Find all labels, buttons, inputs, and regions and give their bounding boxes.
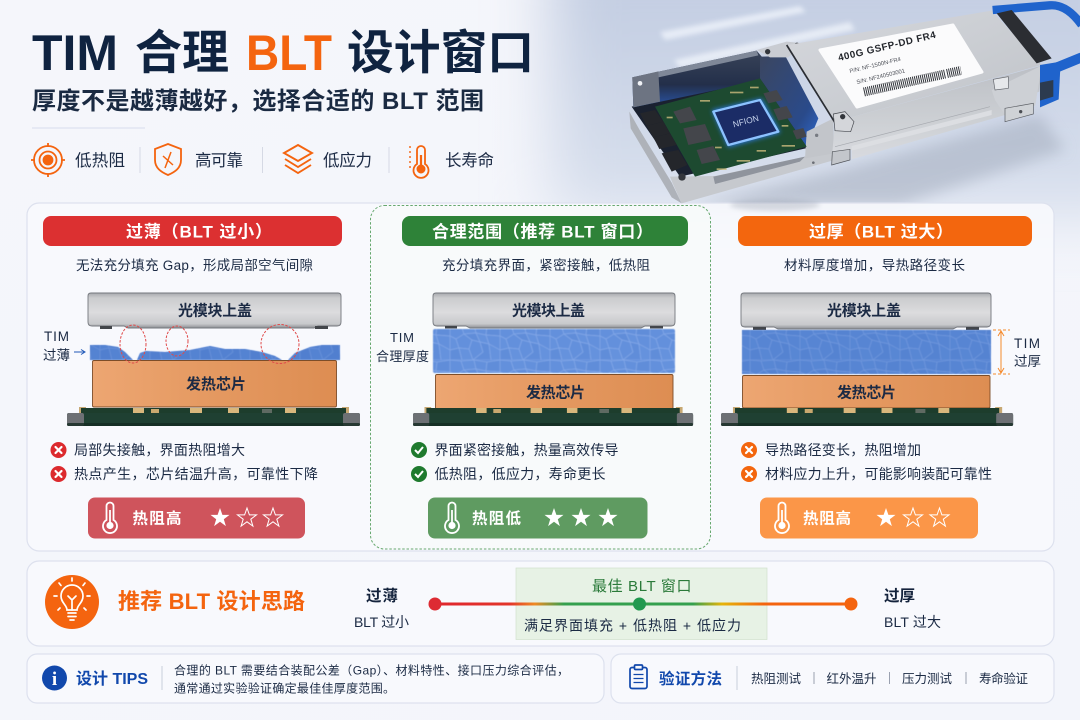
icon: info: i <box>52 669 57 690</box>
label: high reliability: 高可靠 <box>195 151 243 170</box>
subtitle: 厚度不是越薄越好，选择合适的 BLT 范围 <box>32 88 484 115</box>
optimal window band <box>516 568 767 640</box>
header: too thick: 过厚（BLT 过大） <box>809 222 953 242</box>
proper TIM layer <box>433 329 675 373</box>
title <box>32 25 534 81</box>
thick TIM layer <box>742 330 991 374</box>
heading: 验证方法 <box>659 669 722 688</box>
method list: 寿命验证 <box>979 671 1028 686</box>
heat chip <box>436 374 673 418</box>
label: too thick: BLT 过大 <box>884 614 941 630</box>
diagram: thin TIM <box>43 293 360 426</box>
TIM callout: 过薄 <box>43 348 70 363</box>
header: too thick <box>738 216 1032 246</box>
bullets: recommended: 界面紧密接触，热量高效传导 <box>434 442 618 458</box>
method list: 热阻测试 <box>751 671 801 686</box>
label: low thermal resistance: 低热阻 <box>75 151 125 170</box>
circuit board <box>721 407 1013 426</box>
blue pull handle <box>993 5 1080 107</box>
rating: high thermal resistance: 热阻高 <box>803 508 851 528</box>
icon: clipboard <box>630 665 647 688</box>
title: 设计窗口 <box>347 26 534 79</box>
rating: high thermal resistance: 热阻高 <box>132 508 182 528</box>
column: too thin <box>43 216 360 538</box>
description: 材料厚度增加，导热路径变长 <box>784 258 966 273</box>
rating: low thermal resistance <box>428 498 648 538</box>
icon: low thermal resistance target <box>31 143 65 177</box>
heading: 设计 TIPS <box>76 670 148 688</box>
title: 合理 <box>135 26 229 79</box>
module cover <box>741 293 991 330</box>
label: long life: 长寿命 <box>445 151 494 170</box>
thickness scale line <box>428 598 858 610</box>
heat chip: 发热芯片 <box>186 375 246 393</box>
label: too thin <box>354 587 409 630</box>
TIM callout: TIM <box>1014 336 1040 351</box>
description: 充分填充界面，紧密接触，低热阻 <box>442 257 650 273</box>
panel: three BLT cases <box>27 203 1054 551</box>
heat chip <box>742 376 990 416</box>
icon: light bulb <box>45 575 99 629</box>
optimal window band: 最佳 BLT 窗口 <box>592 577 692 595</box>
circuit board <box>413 407 693 426</box>
header: recommended: 合理范围（推荐 BLT 窗口） <box>432 222 653 242</box>
method list: 压力测试 <box>902 671 952 686</box>
header: too thin: 过薄（BLT 过小） <box>126 222 272 242</box>
heading: 推荐 BLT 设计思路 <box>118 589 305 614</box>
bullets: too thick: 材料应力上升，可能影响装配可靠性 <box>765 466 992 482</box>
TIM callout: TIM <box>44 329 69 344</box>
heat chip <box>92 360 336 421</box>
bullets: recommended: 低热阻，低应力，寿命更长 <box>434 466 606 482</box>
method list <box>751 671 1028 686</box>
icon: shield <box>155 144 181 175</box>
panel: recommended BLT approach <box>27 561 1054 646</box>
circuit board <box>640 78 807 177</box>
icon: thermometer <box>410 146 428 178</box>
label: too thin: BLT 过小 <box>354 614 409 630</box>
module tray and base <box>629 42 834 203</box>
product label: 400G GSFP-DD FR4 <box>837 30 937 64</box>
column: recommended <box>376 216 693 538</box>
rating: high thermal resistance <box>88 498 305 538</box>
label: too thick <box>884 587 941 630</box>
title: BLT <box>246 25 332 81</box>
module cover: 光模块上盖 <box>512 302 585 320</box>
tips text: 合理的 BLT 需要结合装配公差（Gap）、材料特性、接口压力综合评估， <box>174 662 569 678</box>
heat chip: 发热芯片 <box>837 384 896 402</box>
header: too thin <box>43 216 342 246</box>
product label: S/N: NF240503001 <box>856 69 906 86</box>
module cover: 光模块上盖 <box>178 302 252 320</box>
optimal window band: 满足界面填充 + 低热阻 + 低应力 <box>524 618 741 634</box>
label: low stress: 低应力 <box>323 151 372 170</box>
module cover <box>433 293 675 328</box>
title: TIM <box>32 25 118 81</box>
product label: P/N: NF-1500N-FR4 <box>849 57 902 75</box>
bullets: too thin: 局部失接触，界面热阻增大 <box>74 442 245 458</box>
product label <box>820 25 982 107</box>
thin TIM layer with air gaps <box>90 345 340 360</box>
tips text <box>174 662 569 696</box>
module cover: 光模块上盖 <box>827 302 901 320</box>
tips text: 通常通过实验验证确定最佳佳厚度范围。 <box>174 680 395 696</box>
TIM callout: 合理厚度 <box>376 349 429 364</box>
icon: layers <box>284 145 312 173</box>
module lid <box>787 11 1042 165</box>
heat chip: 发热芯片 <box>526 384 585 402</box>
glowing chip: NFION <box>732 113 760 129</box>
TIM callout <box>1014 336 1041 369</box>
diagram: proper TIM <box>376 293 693 426</box>
bullets: too thick <box>741 442 992 482</box>
diagram: thick TIM <box>721 293 1041 426</box>
thickness dimension arrow <box>993 330 1010 374</box>
TIM callout <box>43 329 85 363</box>
TIM callout: 过厚 <box>1014 354 1041 369</box>
label: too thick: 过厚 <box>884 587 915 605</box>
method list: 红外温升 <box>826 671 876 686</box>
panel: design tips <box>27 654 604 703</box>
bullets: too thin <box>50 442 318 482</box>
circuit board <box>67 407 360 426</box>
bullets: recommended <box>411 442 618 482</box>
rating: low thermal resistance: 热阻低 <box>472 510 521 528</box>
header: recommended <box>402 216 688 246</box>
feature row <box>31 143 494 178</box>
rating: high thermal resistance <box>760 498 978 538</box>
bullets: too thin: 热点产生，芯片结温升高，可靠性下降 <box>74 466 318 482</box>
bullets: too thick: 导热路径变长，热阻增加 <box>765 442 921 458</box>
hero: 400G optical module <box>629 5 1080 203</box>
icon: info <box>42 666 67 690</box>
module cover <box>88 293 341 329</box>
TIM callout <box>376 330 429 364</box>
air gap markers <box>120 324 299 364</box>
label: too thin: 过薄 <box>366 587 398 605</box>
panel: verification methods <box>611 654 1054 703</box>
TIM callout: TIM <box>390 330 414 345</box>
description: 无法充分填充 Gap，形成局部空气间隙 <box>76 258 313 273</box>
glowing chip <box>712 98 781 147</box>
panel: recommended window highlight <box>370 206 710 549</box>
column: too thick <box>721 216 1041 538</box>
